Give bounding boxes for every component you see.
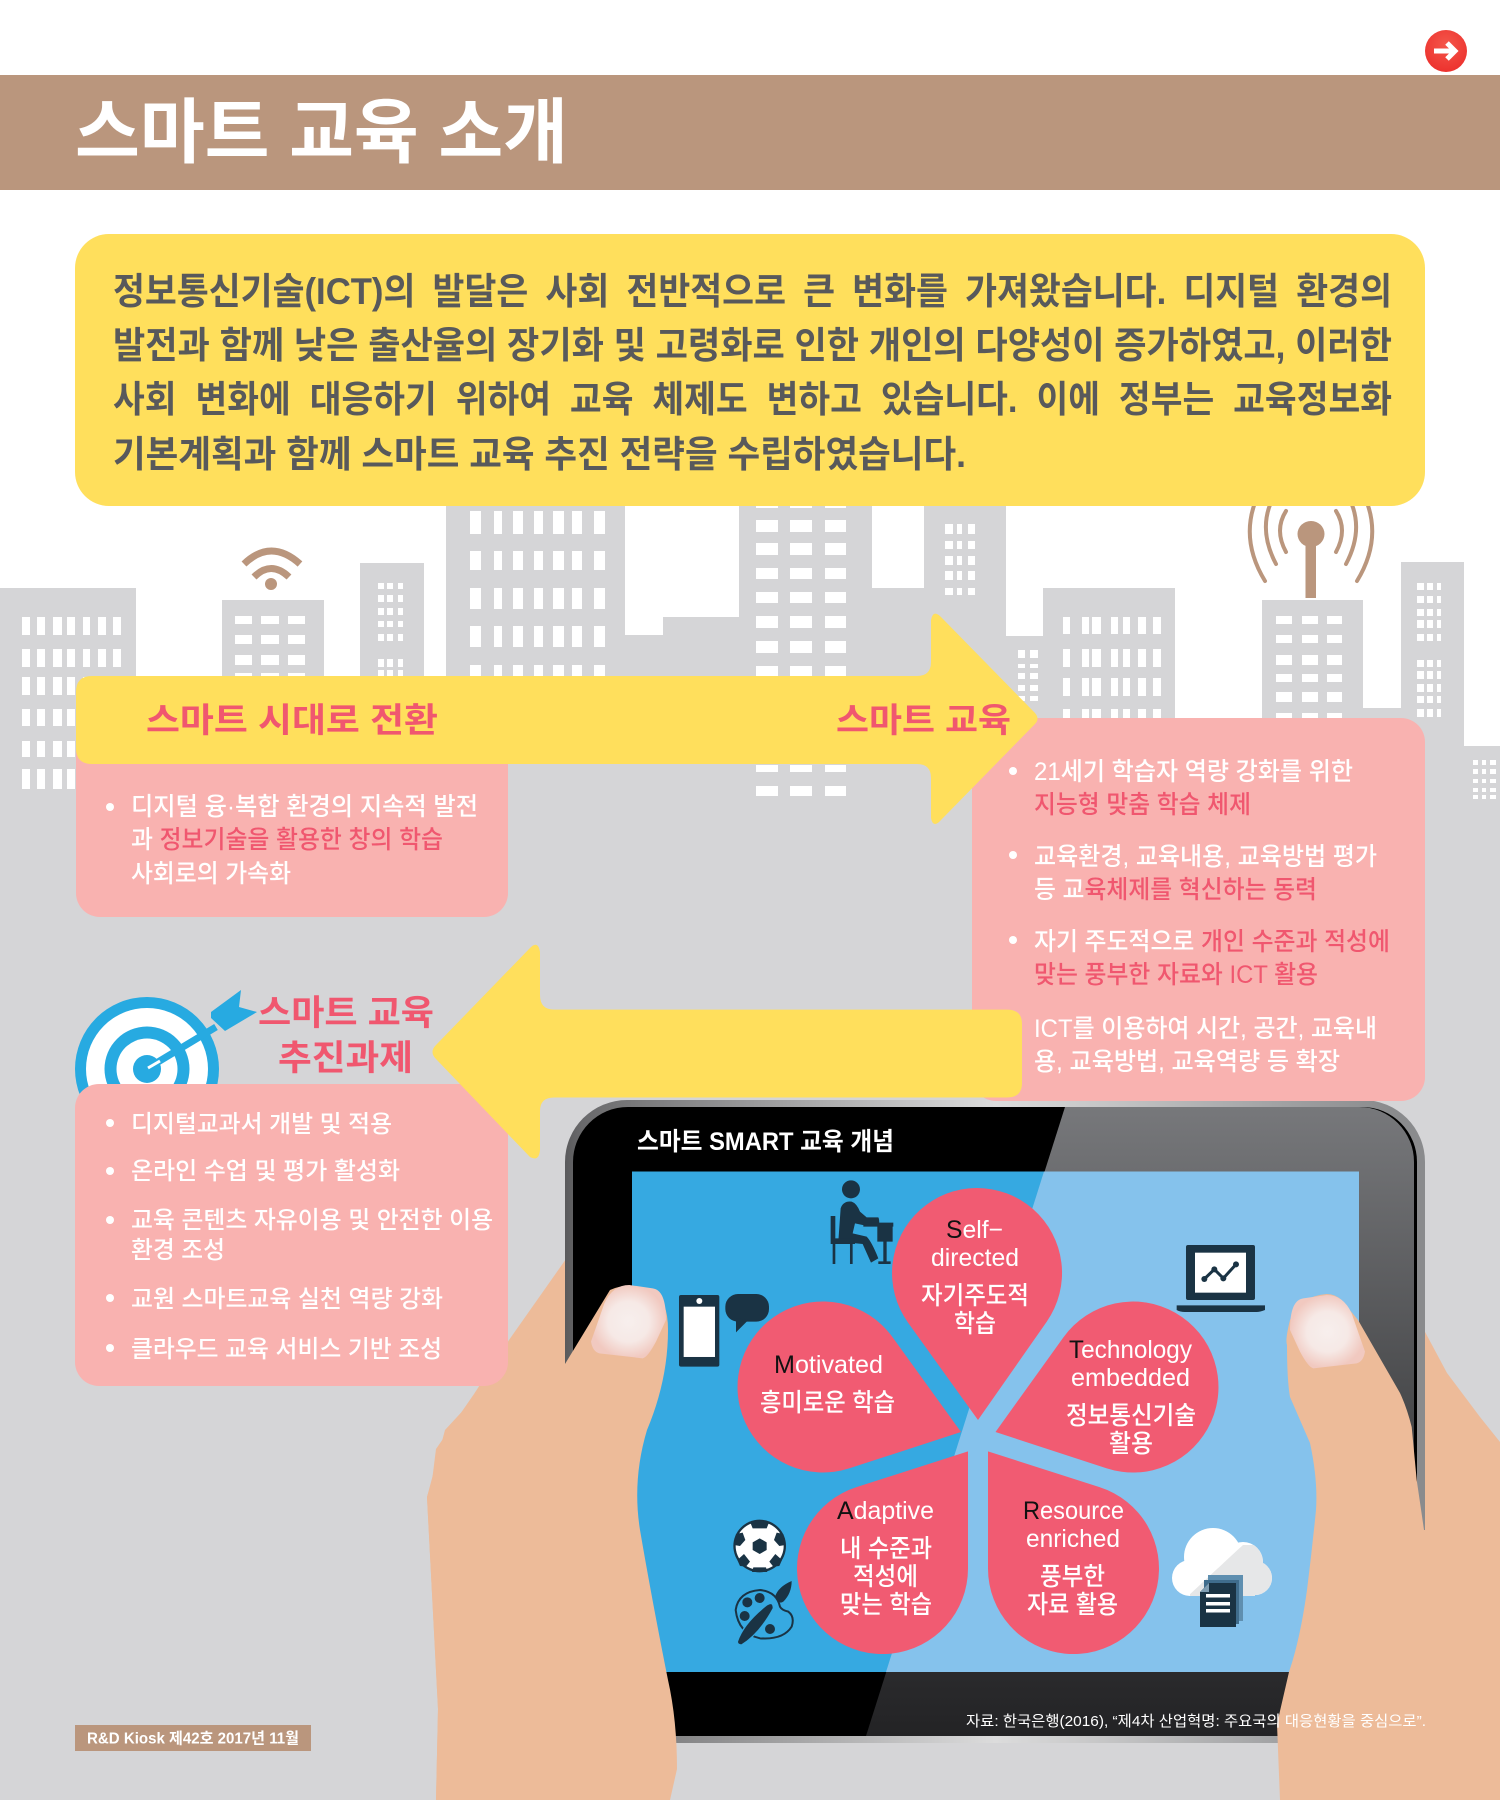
panel: smart education tasks: 교육 콘텐츠 자유이용 및 안전한 이용 xyxy=(131,1207,493,1234)
intro text panel: 사회 변화에 대응하기 위하여 교육 체제도 변하고 있습니다. 이에 정부는 교육정보화 xyxy=(113,379,1392,420)
petal: Motivated: Motivated xyxy=(774,1351,883,1379)
arrow label start: 스마트 시대로 전환 xyxy=(146,702,438,740)
panel: smart education tasks: 교원 스마트교육 실천 역량 강화 xyxy=(131,1286,443,1313)
panel: smart era transition: 과 정보기술을 활용한 창의 학습 xyxy=(131,826,443,854)
panel: smart education tasks: 환경 조성 xyxy=(131,1237,225,1264)
icon: phone and speech bubble xyxy=(679,1294,769,1367)
petal: Resource enriched: enriched xyxy=(1026,1525,1120,1553)
petal: Technology embedded: 정보통신기술 xyxy=(1066,1402,1196,1430)
petal: Technology embedded: 활용 xyxy=(1109,1430,1153,1458)
petal: Adaptive: 내 수준과 xyxy=(840,1535,932,1563)
icon: wifi signal xyxy=(244,551,300,590)
icon: next arrow button xyxy=(1425,30,1467,72)
petal: Resource enriched xyxy=(988,1451,1159,1654)
petal: Self-directed: Self− xyxy=(946,1216,1003,1244)
petal: Adaptive xyxy=(797,1451,968,1654)
icon: antenna tower xyxy=(1250,500,1372,598)
screen xyxy=(632,1172,1359,1672)
intro text panel: 발전과 함께 낮은 출산율의 장기화 및 고령화로 인한 개인의 다양성이 증가하였고, 이러한 xyxy=(113,325,1392,366)
panel: smart education: 교육환경, 교육내용, 교육방법 평가 xyxy=(1034,843,1377,871)
footer tag xyxy=(75,1725,311,1751)
arrow: right to smart education xyxy=(76,614,1038,824)
petal: Resource enriched: Resource xyxy=(1023,1497,1124,1525)
footer tag: R&D Kiosk 제42호 2017년 11월 xyxy=(87,1730,299,1748)
panel: smart era transition: 디지털 융·복합 환경의 지속적 발전 xyxy=(131,793,478,821)
tablet heading: 스마트 SMART 교육 개념 xyxy=(637,1128,894,1156)
panel: smart education tasks: 클라우드 교육 서비스 기반 조성 xyxy=(131,1336,442,1363)
intro text panel xyxy=(75,234,1425,506)
icon: person at desk xyxy=(831,1180,893,1264)
heading: smart education tasks xyxy=(258,994,434,1078)
panel: smart education: 용, 교육방법, 교육역량 등 확장 xyxy=(1034,1048,1340,1076)
panel: smart education: ICT를 이용하여 시간, 공간, 교육내 xyxy=(1034,1015,1377,1043)
panel: smart education: 자기 주도적으로 개인 수준과 적성에 xyxy=(1034,928,1390,956)
petal: Adaptive: 맞는 학습 xyxy=(840,1591,932,1619)
petal: Resource enriched: 풍부한 xyxy=(1040,1563,1105,1591)
left hand xyxy=(427,1285,677,1800)
panel: smart era transition: 사회로의 가속화 xyxy=(131,860,291,888)
panel: smart education: 등 교육체제를 혁신하는 동력 xyxy=(1034,876,1317,904)
panel: smart education tasks: 온라인 수업 및 평가 활성화 xyxy=(131,1158,400,1185)
right hand xyxy=(1277,1294,1500,1800)
panel: smart era transition xyxy=(76,700,508,917)
source note: 자료: 한국은행(2016), “제4차 산업혁명: 주요국의 대응현황을 중심으로”. xyxy=(966,1713,1426,1730)
petal: Technology embedded: embedded xyxy=(1071,1364,1190,1392)
petal: Self-directed: 학습 xyxy=(954,1310,996,1338)
petal: Self-directed: directed xyxy=(931,1244,1019,1272)
panel: smart education tasks xyxy=(75,1084,508,1386)
arrow: left to tasks xyxy=(432,945,1022,1158)
city skyline background xyxy=(0,500,1500,1800)
arrow label end: 스마트 교육 xyxy=(836,702,1011,740)
icon: soccer ball xyxy=(733,1520,786,1572)
icon: target with dart xyxy=(75,990,257,1141)
right hand back xyxy=(1420,1323,1500,1800)
panel: smart education: 지능형 맞춤 학습 체제 xyxy=(1034,791,1251,819)
title: 스마트 교육 소개 xyxy=(75,94,568,173)
intro text panel: 정보통신기술(ICT)의 발달은 사회 전반적으로 큰 변화를 가져왔습니다. 디지털 환경의 xyxy=(113,271,1392,312)
petal: Adaptive: 적성에 xyxy=(853,1563,918,1591)
header bar xyxy=(0,75,1500,190)
heading: smart education tasks: 스마트 교육 xyxy=(258,994,434,1033)
panel: smart education: 맞는 풍부한 자료와 ICT 활용 xyxy=(1034,961,1318,989)
petal: Motivated xyxy=(738,1302,961,1473)
panel: smart education xyxy=(972,718,1425,1101)
petal: Self-directed: 자기주도적 xyxy=(921,1282,1029,1310)
petal: Technology embedded: Technology xyxy=(1069,1336,1192,1364)
icon: cloud and documents xyxy=(1172,1528,1272,1627)
panel: smart education: 21세기 학습자 역량 강화를 위한 xyxy=(1034,758,1353,786)
left hand back xyxy=(427,1259,566,1800)
icon: laptop chart xyxy=(1177,1245,1265,1312)
petal: Adaptive: Adaptive xyxy=(837,1497,934,1525)
heading: smart education tasks: 추진과제 xyxy=(278,1039,413,1078)
petal: Technology embedded xyxy=(996,1302,1218,1473)
petal: Motivated: 흥미로운 학습 xyxy=(760,1389,895,1417)
panel: smart education tasks: 디지털교과서 개발 및 적용 xyxy=(131,1111,392,1138)
intro text panel: 기본계획과 함께 스마트 교육 추진 전략을 수립하였습니다. xyxy=(113,434,966,475)
petal: Self-directed xyxy=(892,1188,1062,1420)
petal: Resource enriched: 자료 활용 xyxy=(1027,1591,1118,1619)
tablet: smart education concept xyxy=(565,1100,1425,1743)
icon: paint palette xyxy=(736,1581,793,1645)
